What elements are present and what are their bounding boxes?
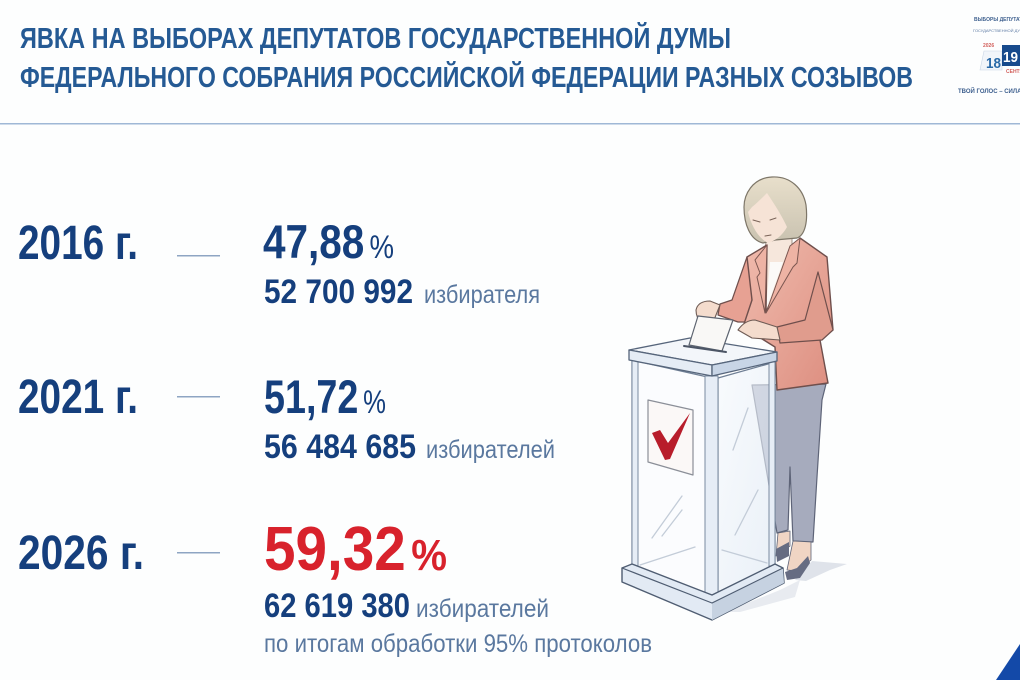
dash 2016 — [177, 255, 220, 256]
note: protocols: по итогам обработки 95% протоколов — [264, 630, 652, 658]
woman: facial features — [753, 218, 776, 236]
woman: right sleeve — [777, 272, 833, 343]
woman: jacket — [743, 238, 833, 390]
woman: jacket lapels — [755, 238, 800, 313]
row: 2026 — [18, 515, 652, 658]
floor shadow — [725, 561, 847, 612]
logo: elections 18-19 September — [958, 17, 1020, 95]
header divider — [0, 123, 1020, 124]
logo: elections 18-19 September: ТВОЙ ГОЛОС – СИЛА — [958, 87, 1020, 95]
sign with check mark — [648, 400, 693, 475]
logo: elections 18-19 September: 18 — [986, 55, 1001, 72]
box: lid — [629, 338, 777, 365]
woman: trousers — [752, 384, 826, 542]
woman: hands — [696, 301, 780, 340]
woman: shoes — [776, 531, 811, 580]
voters 2016: 52 700 992 — [264, 273, 413, 311]
woman: neck and blouse — [762, 228, 792, 312]
row: 2021 — [18, 370, 555, 466]
box: glass left side — [632, 360, 712, 597]
voters 2026: 62 619 380 — [264, 587, 410, 625]
turnout 2021: 51,72% — [264, 370, 386, 423]
box: base — [622, 564, 784, 620]
logo: elections 18-19 September: 19 — [1003, 49, 1018, 66]
box: glass right side — [718, 362, 775, 597]
title — [20, 21, 913, 94]
voters 2021: 56 484 685 — [264, 428, 416, 466]
voters label 2026: избирателей — [416, 595, 549, 623]
woman: hair — [744, 177, 807, 243]
year 2016: 2016 г. — [18, 217, 138, 270]
dash 2026 — [177, 552, 220, 554]
illustration: woman voting — [622, 177, 847, 620]
turnout 2026: 59,32% — [264, 515, 447, 584]
turnout 2016: 47,88% — [263, 215, 394, 268]
title: ЯВКА НА ВЫБОРАХ ДЕПУТАТОВ ГОСУДАРСТВЕННОЙ ДУМЫ — [20, 21, 731, 55]
row: 2016 — [18, 215, 540, 311]
corner accent — [996, 644, 1020, 680]
box: interior reflections — [640, 408, 767, 565]
year 2026: 2026 г. — [18, 527, 144, 580]
ballot box — [622, 316, 784, 620]
voters label 2016: избирателя — [424, 281, 540, 309]
dash 2021 — [177, 396, 220, 398]
ballot paper — [689, 316, 733, 351]
woman: left sleeve — [718, 257, 752, 322]
logo: elections 18-19 September: 2026 — [983, 43, 994, 49]
woman: face — [748, 193, 787, 243]
year 2021: 2021 г. — [18, 371, 138, 424]
voters label 2021: избирателей — [426, 436, 555, 464]
box: frame posts — [632, 360, 775, 597]
